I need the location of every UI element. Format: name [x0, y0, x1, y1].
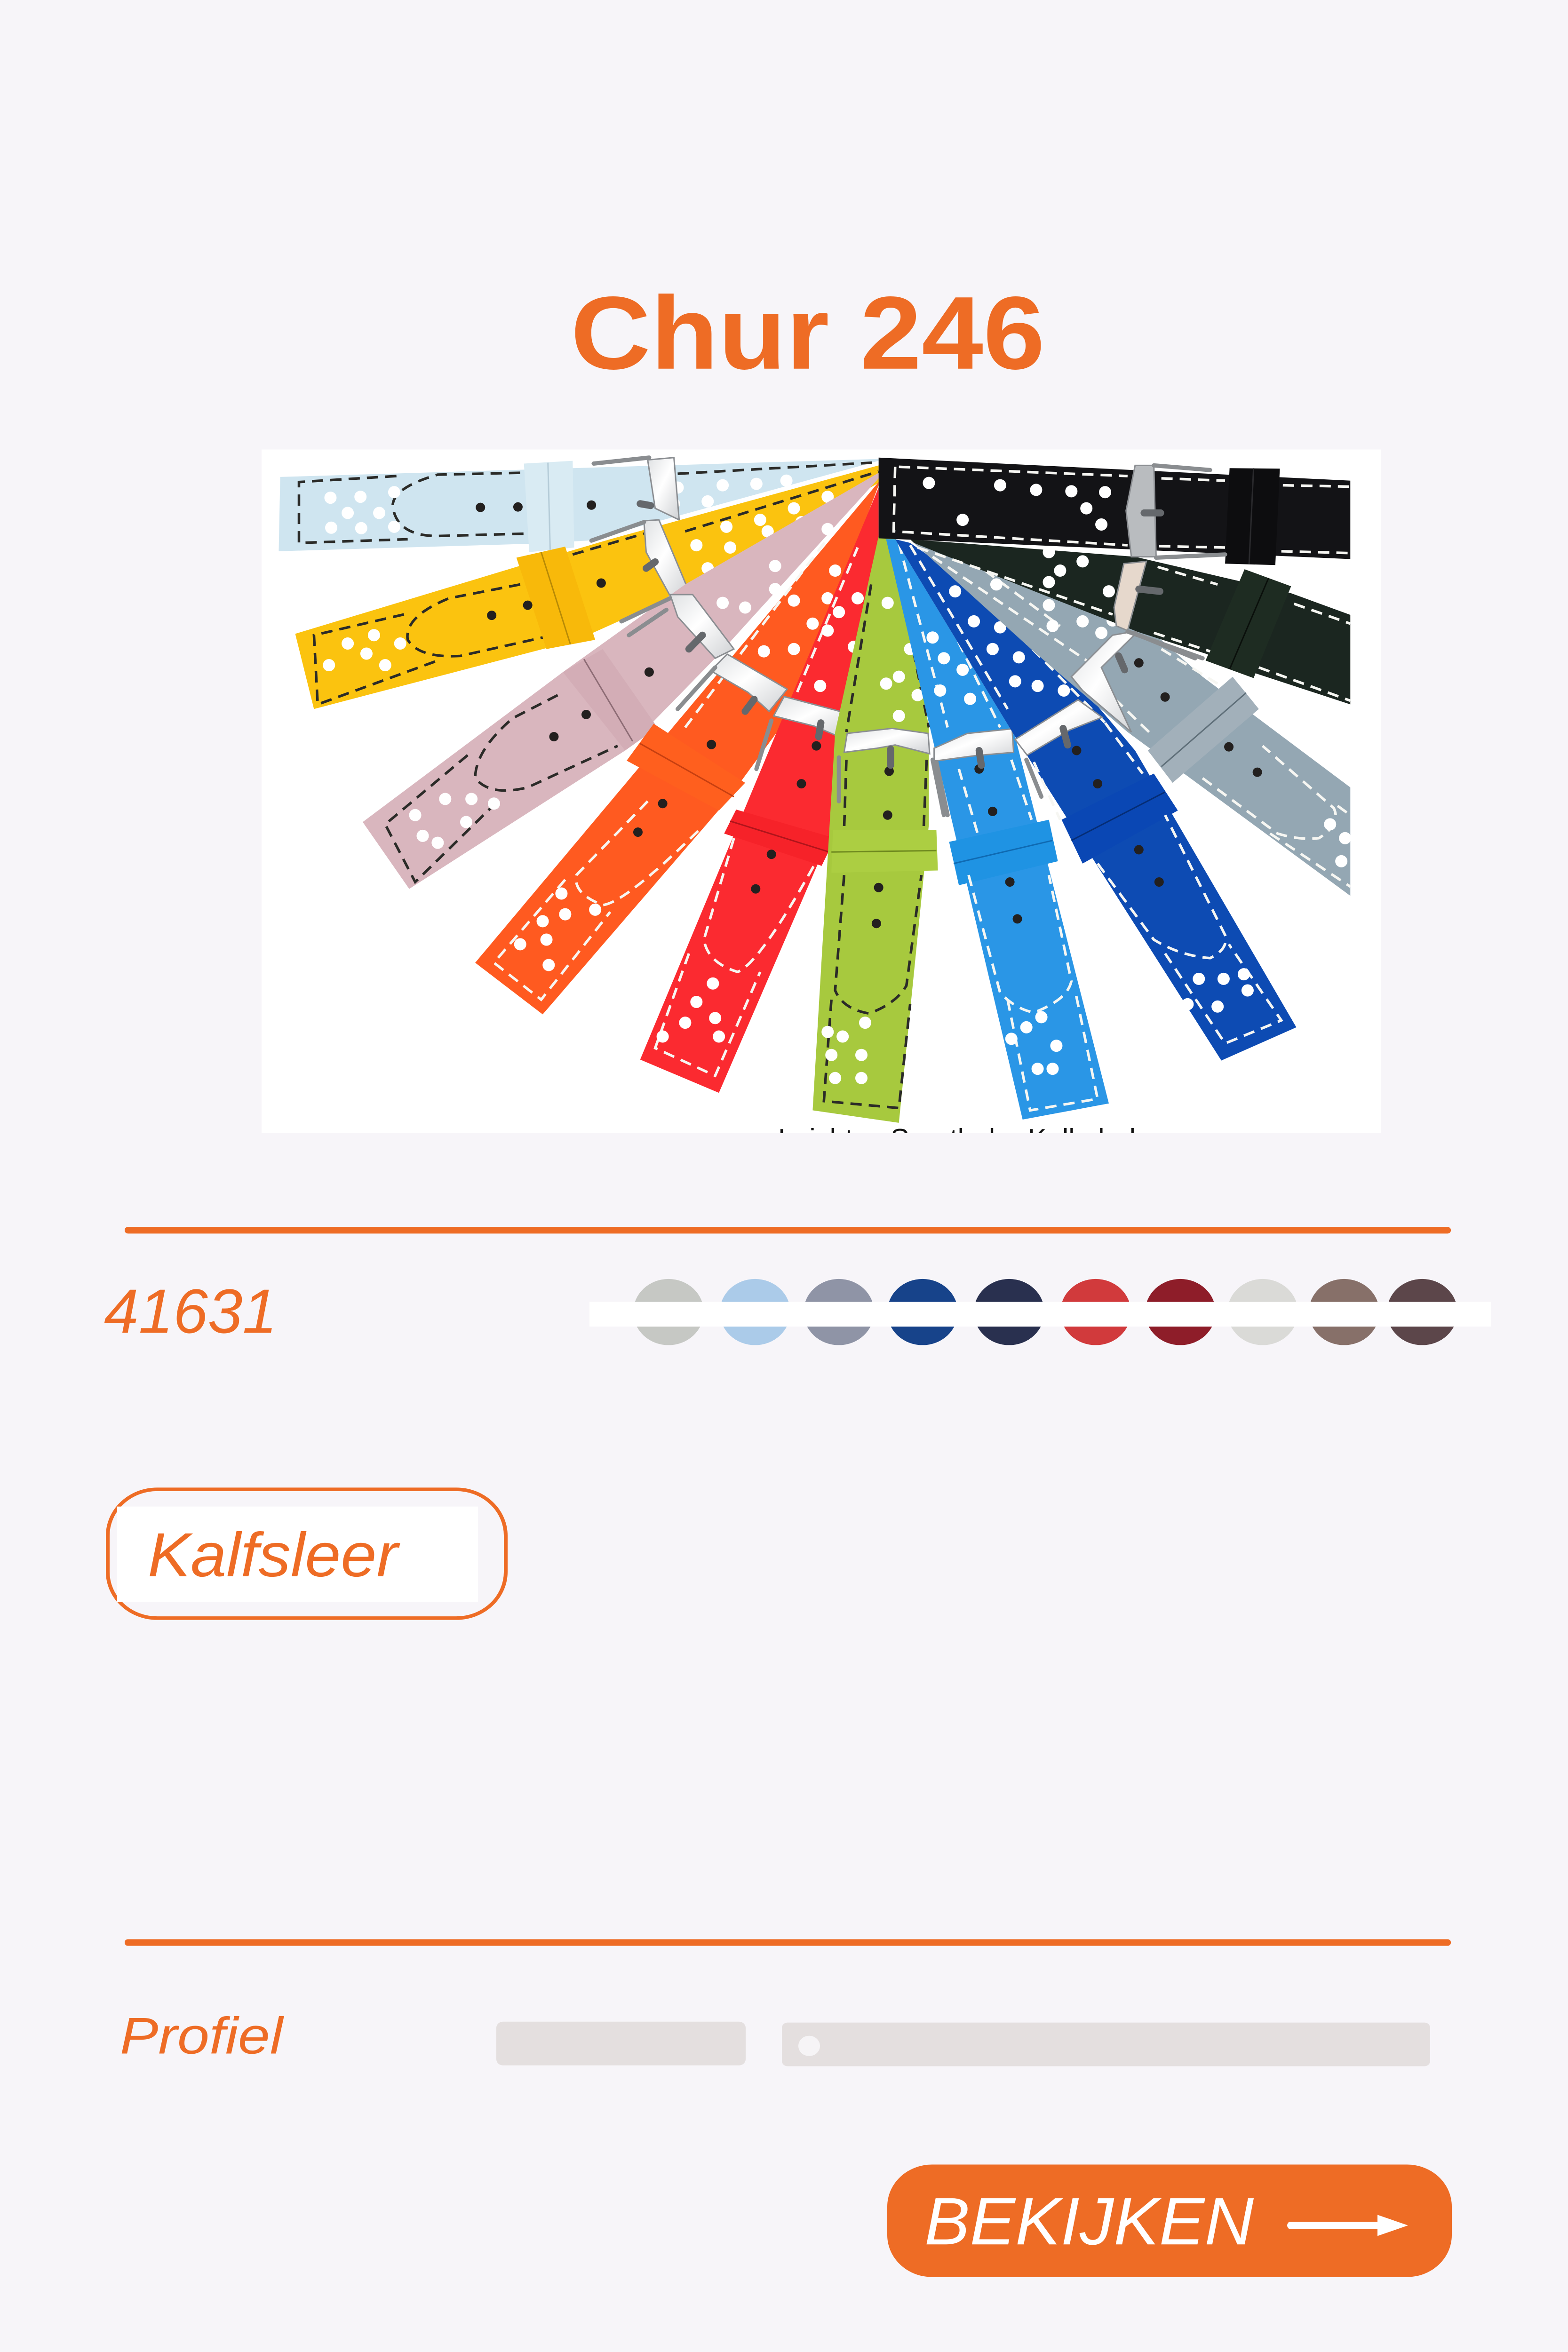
icon: arrow: [1287, 2215, 1408, 2236]
photo: fan of coloured watch straps: [262, 449, 1381, 1154]
material tag: [108, 1489, 506, 1618]
profile bar long: [782, 2023, 1430, 2066]
strap: royal blue: [895, 539, 1297, 1061]
photo caption (cropped): Leichtes Sportleder Kalbsleder: [778, 1123, 1161, 1154]
strap: orange: [475, 482, 879, 1014]
strap: black: [879, 458, 1350, 565]
button: bekijken: [887, 2165, 1452, 2277]
strap: red: [640, 487, 879, 1093]
strap: yellow: [295, 465, 879, 709]
material label: Kalfsleer: [148, 1520, 400, 1589]
strap: grey: [914, 543, 1350, 896]
strap: sky blue: [886, 539, 1109, 1120]
button label: BEKIJKEN: [924, 2185, 1254, 2259]
article number: 41631: [104, 1276, 277, 1346]
divider top: [125, 1227, 1451, 1233]
divider bottom: [125, 1939, 1451, 1946]
profile label: Profiel: [120, 2007, 284, 2065]
profile bar short: [496, 2022, 746, 2066]
strap: pink: [363, 473, 879, 889]
colour swatches: [589, 1279, 1491, 1345]
strap: dark green: [910, 539, 1350, 704]
strap: lime green: [812, 536, 944, 1123]
title: Chur 246: [571, 276, 1045, 391]
strap: light blue: [279, 458, 879, 552]
